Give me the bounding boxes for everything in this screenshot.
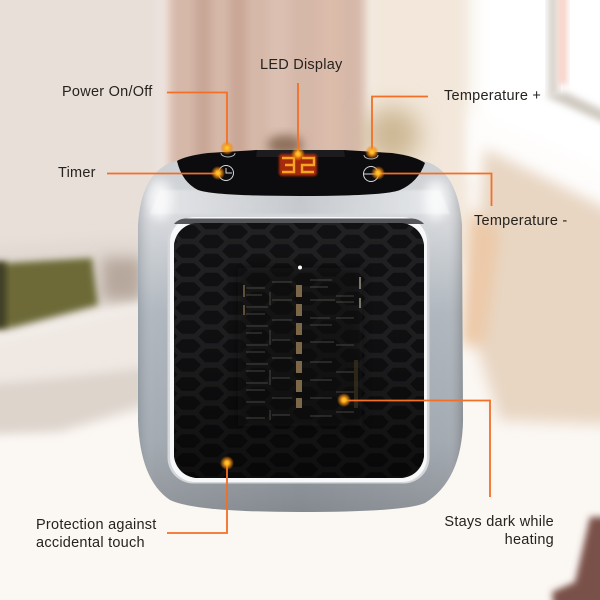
label: LED display: LED Display: [260, 57, 343, 73]
glowing callout dots: [211, 141, 385, 470]
label: temperature minus: Temperature -: [474, 213, 568, 229]
control panel: [177, 150, 425, 196]
heater device: [138, 150, 463, 512]
label: stays dark while heating: heating: [505, 532, 554, 548]
icon: minus button: [364, 166, 378, 182]
small white indicator light: [298, 266, 302, 270]
label: temperature plus: Temperature +: [444, 88, 541, 104]
label: timer: Timer: [58, 165, 96, 181]
chrome frame: [168, 216, 430, 484]
label: protection against accidental touch: Protection against: [36, 517, 157, 533]
heating element: [238, 268, 362, 426]
icon: power button: [221, 153, 235, 157]
label: power on/off: Power On/Off: [62, 84, 153, 100]
LED display reading 32: [279, 154, 317, 176]
icon: timer clock: [218, 166, 234, 180]
label: protection against accidental touch: accidental touch: [36, 535, 145, 551]
hexagonal front grill: [174, 223, 424, 478]
label: stays dark while heating: Stays dark while: [444, 514, 554, 530]
icon: plus button: [364, 155, 378, 159]
callout lines: [107, 83, 492, 533]
heater body shell: [138, 150, 463, 512]
